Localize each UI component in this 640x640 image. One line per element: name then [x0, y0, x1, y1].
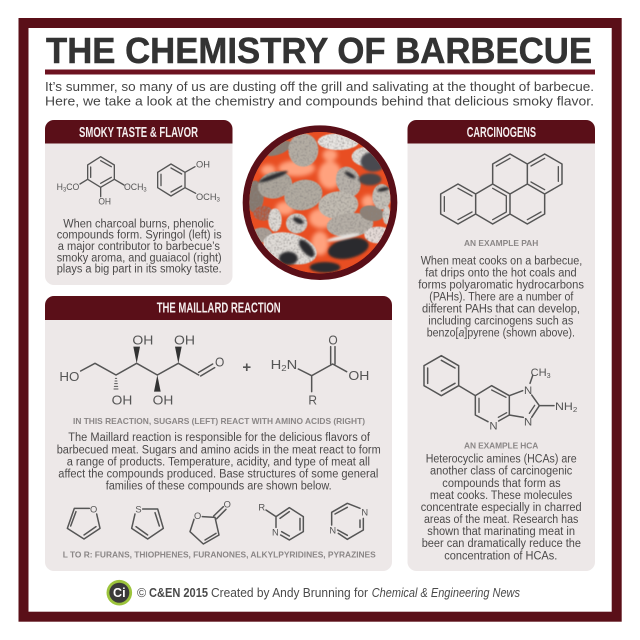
molecule: furan: O [90, 505, 97, 515]
text: smoky description: smoky aroma, and guaiacol (right) [57, 252, 222, 264]
molecule: example HCA: N [524, 416, 532, 428]
molecule: amino acid: H [271, 357, 280, 372]
molecule: furanone [190, 500, 231, 544]
molecule: example HCA: CH [531, 367, 547, 379]
panel: smoky taste and flavor [45, 120, 232, 285]
text: HCA description: beer can dramatically reduce the [422, 538, 581, 550]
molecule: sugar: OH [153, 392, 173, 407]
text: PAH description: benzo[a]pyrene (shown above). [427, 328, 575, 340]
text: PAH description: different PAHs that can develop, [422, 303, 580, 315]
molecule: syringol: OCH [124, 182, 144, 192]
caption: example PAH: AN EXAMPLE PAH [464, 238, 538, 248]
plus sign: + [242, 359, 251, 376]
molecule: amino acid: 2 [281, 363, 287, 373]
caption: compound families: L TO R: FURANS, THIOPHENES, FURANONES, ALKYLPYRIDINES, PYRAZINES [63, 549, 376, 559]
molecule: furan [67, 505, 100, 539]
text: HCA description: another class of carcinogenic [430, 466, 573, 478]
text: smoky description [57, 218, 222, 276]
molecule: guaiacol: 3 [217, 198, 221, 204]
text: PAH description: fat drips onto the hot coals and [425, 268, 577, 280]
molecule: sugar: HO [59, 369, 79, 384]
molecule: example HCA [424, 356, 577, 432]
text: PAH description [418, 256, 584, 340]
molecule: thiophene [132, 505, 163, 539]
molecule: sugar: OH [174, 332, 195, 347]
text: Maillard description [57, 432, 381, 492]
text: PAH description: When meat cooks on a barbecue, [421, 256, 582, 268]
text: smoky description: When charcoal burns, phenolic [63, 218, 214, 230]
molecule: sugar: O [215, 354, 224, 369]
text: smoky description: compounds form. Syringol (left) is [57, 230, 222, 242]
molecule: guaiacol [158, 160, 221, 204]
molecule: furanone: O [224, 500, 231, 510]
footer: Compound Interest logo [106, 580, 132, 606]
title underline [45, 70, 595, 74]
molecule: pyrazine: N [361, 508, 368, 518]
molecule: alkylpyridine [258, 503, 303, 540]
intro text [45, 79, 594, 109]
text: HCA description: concentrate especially in charred [421, 502, 582, 514]
text: HCA description: compounds that form as [442, 478, 561, 490]
molecule: syringol [57, 157, 147, 206]
text: PAH description: including carcinogens such as [428, 315, 574, 327]
heading: smoky taste and flavor: SMOKY TASTE & FLAVOR [79, 124, 198, 141]
molecule: example HCA: NH [555, 401, 571, 413]
molecule: sugar: OH [112, 392, 132, 407]
intro text: Here, we take a look at the chemistry and compounds behind that delicious smoky flavor. [45, 94, 594, 109]
text: PAH description: (PAHs). There are a number of [429, 291, 574, 303]
footer: credit line [137, 586, 520, 600]
text: HCA description: shown that marinating meat in [427, 526, 575, 538]
molecule: syringol: 3 [63, 188, 67, 194]
text: Maillard description: affect the compounds produced. Base structures of some general [58, 468, 378, 480]
molecule: amino acid: O [328, 332, 338, 347]
text: Maillard description: a range of products. Temperature, acidity, and type of meat all [67, 456, 370, 468]
text: HCA description: areas of the meat. Research has [424, 514, 579, 526]
caption: example HCA: AN EXAMPLE HCA [464, 440, 538, 450]
text: smoky description: a major contributor to barbecue’s [58, 241, 220, 253]
text: Maillard description: barbecued meat. Sugars and amino acids in the meat react to form [57, 444, 381, 456]
molecule: guaiacol: OCH [196, 192, 216, 202]
molecule: guaiacol: OH [196, 160, 210, 170]
molecule: pyrazine: N [329, 525, 336, 535]
molecule: sugar: OH [132, 332, 153, 347]
molecule: amino acid [271, 332, 369, 407]
intro text: It’s summer, so many of us are dusting off the grill and salivating at the thought of barbecue. [45, 79, 594, 94]
molecule: example HCA: N [489, 420, 498, 432]
heading: the Maillard reaction: THE MAILLARD REACTION [157, 300, 281, 317]
text: HCA description: concentration of HCAs. [444, 550, 557, 562]
molecule: amino acid: R [308, 392, 317, 407]
molecule: alkylpyridine: R [258, 503, 265, 513]
molecule: example HCA: 3 [547, 371, 551, 380]
panel: carcinogens [408, 120, 595, 571]
panel: the Maillard reaction [45, 296, 392, 571]
molecule: syringol: CO [66, 182, 79, 192]
caption: sugars and amino acids: IN THIS REACTION, SUGARS (LEFT) REACT WITH AMINO ACIDS (RIGHT) [73, 416, 365, 426]
text: HCA description [421, 454, 582, 562]
text: PAH description: forms polyaromatic hydrocarbons [418, 280, 584, 292]
molecule: sugar [59, 332, 224, 407]
molecule: syringol: 3 [143, 188, 147, 194]
photo: glowing charcoal in round frame [245, 129, 395, 277]
molecule: example HCA: 2 [573, 405, 577, 414]
molecule: alkylpyridine: N [272, 528, 279, 538]
title: THE CHEMISTRY OF BARBECUE [46, 30, 592, 71]
text: smoky description: plays a big part in its smoky taste. [57, 264, 222, 276]
footer: Compound Interest logo: Ci [113, 586, 126, 600]
molecule: pyrazine [329, 503, 368, 539]
molecule: syringol: OH [98, 196, 111, 206]
molecule: syringol: H [57, 182, 63, 192]
molecule: amino acid: OH [348, 368, 369, 383]
text: HCA description: Heterocyclic amines (HCAs) are [426, 454, 577, 466]
molecule: benzo[a]pyrene [441, 154, 562, 224]
molecule: example HCA: N [524, 385, 532, 397]
molecule: amino acid: N [287, 357, 297, 372]
text: Maillard description: The Maillard reaction is responsible for the delicious flavors of [68, 432, 371, 444]
text: HCA description: meat cooks. These molecules [430, 490, 573, 502]
footer: credit line: Created by Andy Brunning for [211, 586, 368, 600]
footer: credit line: Chemical & Engineering News [372, 586, 520, 600]
molecule: thiophene: S [135, 505, 142, 515]
heading: carcinogens: CARCINOGENS [467, 124, 536, 141]
footer: credit line: © [137, 586, 147, 600]
footer: credit line: C&EN 2015 [149, 586, 208, 600]
text: Maillard description: families of these compounds are shown below. [106, 480, 332, 492]
molecule: furanone: O [194, 511, 201, 521]
